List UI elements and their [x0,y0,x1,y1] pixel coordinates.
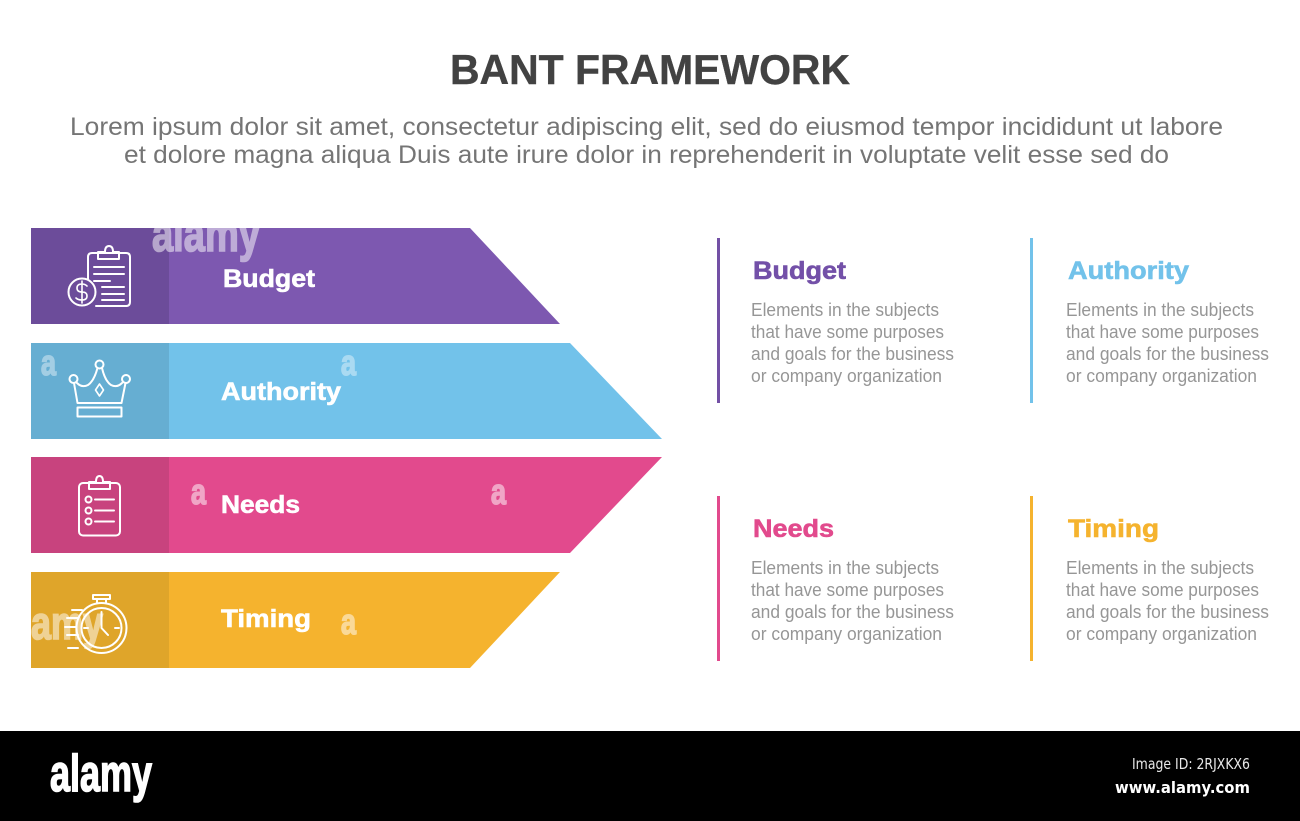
body text: budget: or company organization [751,366,942,386]
watermark: image fragments: amy [31,597,103,649]
heading: needs: Needs [753,515,834,543]
watermark: image fragments: a [341,601,357,642]
body text: timing: and goals for the business [1066,602,1269,622]
footer logo: alamy [50,745,152,803]
panel: needs description [717,496,954,661]
label: needs: Needs [221,491,300,519]
body text: needs: or company organization [751,624,942,644]
label: authority: Authority [221,378,341,406]
panel: needs arrow bar [31,457,662,553]
subtitle text: et dolore magna aliqua Duis aute irure dolor in reprehenderit in voluptate velit esse sed do [124,141,1169,169]
watermark: image fragments: alamy [152,206,260,262]
watermark: image fragments: a [41,342,57,383]
panel: timing arrow bar [31,572,560,668]
body text: timing: that have some purposes [1066,580,1259,600]
body text: budget: and goals for the business [751,344,954,364]
icon: stopwatch [65,595,126,653]
body text: authority: or company organization [1066,366,1257,386]
watermark: image fragments [31,206,507,649]
watermark: image fragments: a [191,471,207,512]
title: BANT FRAMEWORK [450,46,850,93]
body text: timing [1066,558,1269,644]
icon: clipboard with dollar coin [68,246,130,306]
subtitle text [70,113,1223,169]
watermark: image fragments: a [341,342,357,383]
body text: budget: Elements in the subjects [751,300,939,320]
body text: budget: that have some purposes [751,322,944,342]
body text: needs: and goals for the business [751,602,954,622]
body text: authority: Elements in the subjects [1066,300,1254,320]
body text: needs: Elements in the subjects [751,558,939,578]
label: timing: Timing [221,605,311,633]
body text: budget [751,300,954,386]
footer bar [0,731,1300,821]
icon: crown [70,360,130,416]
subtitle text: Lorem ipsum dolor sit amet, consectetur adipiscing elit, sed do eiusmod tempor incididunt ut labore [70,113,1223,141]
footer image id: Image ID: 2RJXKX6 [1132,755,1250,773]
body text: authority: and goals for the business [1066,344,1269,364]
body text: authority: that have some purposes [1066,322,1259,342]
panel: timing description [1030,496,1269,661]
panel: budget description [717,238,954,403]
label: budget: Budget [223,265,316,293]
body text: timing: or company organization [1066,624,1257,644]
body text: needs: that have some purposes [751,580,944,600]
panel: authority description [1030,238,1269,403]
watermark: image fragments: a [491,471,507,512]
heading: budget: Budget [753,257,847,285]
panel: authority arrow bar [31,343,662,439]
body text: needs [751,558,954,644]
panel: budget arrow bar [31,228,560,324]
footer url: www.alamy.com [1115,778,1250,797]
heading: authority: Authority [1068,257,1189,285]
body text: authority [1066,300,1269,386]
heading: timing: Timing [1068,515,1159,543]
body text: timing: Elements in the subjects [1066,558,1254,578]
icon: checklist clipboard [79,476,120,536]
